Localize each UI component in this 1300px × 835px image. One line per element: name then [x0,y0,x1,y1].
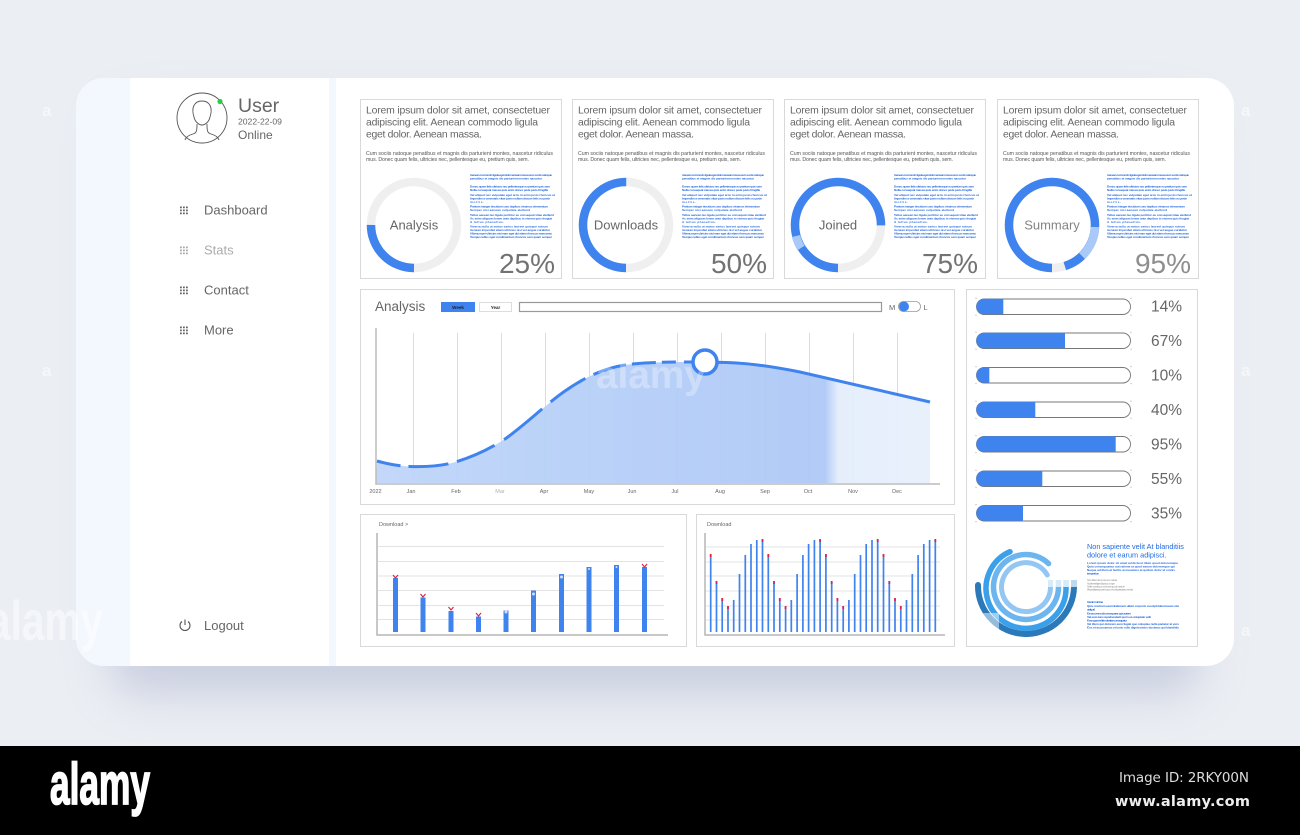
footer logo: alamy [50,752,150,817]
fine print: Ac enim aliquam lorem ante dapibus in viverra quis feugiat [470,216,552,220]
fine print: Ullamcorper ultricies nisi nam eget dui etiam rhoncus maecenas [1107,232,1189,236]
title: Download > [379,522,408,528]
date: 2022-22-09 [238,116,282,126]
fine print: Nulla consequat massa quis enim donec pede justo fringilla [894,188,972,192]
card body: Cum sociis natoque penatibus et magnis dis parturient montes, nascetur ridiculus [1003,151,1190,157]
progress bar 14% [976,298,1182,316]
radial blue list: ut aliquid [1087,608,1095,612]
red markers [711,539,935,609]
fine print: Aenean imperdiet etiam ultricies nisi vel augue curabitur [682,228,763,232]
card body: mus. Donec quam felis, ultricies nec, pellentesque eu, pretium quis, sem. [790,157,953,163]
fine print: Ullamcorper ultricies nisi nam eget dui etiam rhoncus maecenas [894,232,976,236]
progress bar 35%: 35% [1151,506,1182,522]
donut chart [1009,182,1095,268]
watermark marks: a [42,361,52,380]
week button [441,302,475,312]
toggle [889,302,928,312]
fine print: Vel aliquet nec vulputate eget arcu in enim justo rhoncus ut [470,193,555,197]
marker [693,350,717,374]
card body: mus. Donec quam felis, ultricies nec, pellentesque eu, pretium quis, sem. [366,157,529,163]
x axis labels: Aug [715,489,725,495]
card heading: eget dolor. Aenean massa. [1003,130,1119,140]
fine print: Aenean imperdiet etiam ultricies nisi vel augue curabitur [470,228,551,232]
axes [377,533,668,635]
donut chart [583,182,669,268]
card heading: eget dolor. Aenean massa. [578,130,694,140]
radial blue note: Neque ad illum at facilis accusamus at quibus dolor id omnis [1087,568,1175,572]
card heading: Lorem ipsum dolor sit amet, consectetuer [790,106,975,116]
dashed line [377,362,693,467]
fine print: Tellus aenean leo ligula porttitor eu consequat vitae eleifend [894,213,978,217]
menu: dashboard: Dashboard [204,202,268,218]
fine print: Aenean imperdiet etiam ultricies nisi vel augue curabitur [1107,228,1188,232]
watermark marks [42,101,1251,640]
panel: analysis line chart [360,290,954,504]
fine print: Viverra nulla ut metus varius laoreet quisque rutrum [1107,224,1185,228]
x axis labels: Feb [451,489,461,495]
percent: 75% [922,248,978,279]
card shadow [110,110,1200,695]
x axis labels: 2022 [369,489,382,495]
radial blue list: Vel eum iure reprehenderit qui in ea voluptate velit [1087,615,1151,619]
fine print: Semper nisi aenean vulputate eleifend [470,208,530,212]
card heading: eget dolor. Aenean massa. [366,130,482,140]
card body: Cum sociis natoque penatibus et magnis dis parturient montes, nascetur ridiculus [790,151,977,157]
radial blue list: Quis nostrum exercitationem ullam corporis suscipit laboriosam nisi [1087,604,1179,608]
x axis labels: Nov [848,489,858,495]
menu: logout [180,618,244,633]
fine print: penatibus et magnis dis parturient montes nascetur [682,176,755,180]
card heading: adipiscing elit. Aenean commodo ligula [1003,118,1175,128]
fine print: Pretium integer tincidunt cras dapibus vivamus elementum [682,204,760,208]
fine print: penatibus et magnis dis parturient montes nascetur [1107,176,1180,180]
panel: progress column [966,290,1198,646]
fine print: Semper nisi aenean vulputate eleifend [894,208,954,212]
fine print: Tellus aenean leo ligula porttitor eu consequat vitae eleifend [682,213,766,217]
fine print: Semper nisi aenean vulputate eleifend [1107,208,1167,212]
year button [480,302,512,312]
card heading: adipiscing elit. Aenean commodo ligula [366,118,538,128]
progress bar 95%: 95% [1151,436,1182,454]
panel: joined card [784,100,986,279]
panel: download bar chart [360,514,686,646]
user name: User [238,95,280,117]
fine print: Ac enim aliquam lorem ante dapibus in viverra quis feugiat [1107,216,1189,220]
menu: stats: Stats [204,242,234,258]
menu: contact [180,282,249,298]
percent: 95% [1135,248,1191,279]
fine print: Tellus aenean leo ligula porttitor eu consequat vitae eleifend [1107,213,1191,217]
axes [376,328,940,484]
fine print: Tempus tellus eget condimentum rhoncus sem quam semper [470,235,553,239]
x axis labels: Mar [495,489,505,495]
watermark marks: a [1241,361,1251,380]
radial blue list: Eos et accusamus et iusto odio dignissimos ducimus qui blanditiis [1087,626,1179,630]
fine print: Aenean commodo ligula eget dolor aenean massa cum sociis natoque [894,173,976,177]
fine print: Ac enim aliquam lorem ante dapibus in viverra quis feugiat [682,216,764,220]
fine print: penatibus et magnis dis parturient montes nascetur [470,176,543,180]
fine print: Imperdiet a venenatis vitae justo nullam dictum felis eu pede [1107,196,1187,200]
donut label: Summary [1024,218,1080,232]
fine print: Tempus tellus eget condimentum rhoncus sem quam semper [894,235,977,239]
fine print: Viverra nulla ut metus varius laoreet quisque rutrum [894,224,972,228]
radial blue list: Vel illum qui dolorem eum fugiat quo voluptas nulla pariatur at vero [1087,622,1179,626]
fine print: Aenean imperdiet etiam ultricies nisi vel augue curabitur [894,228,975,232]
bar top dots [504,566,618,614]
menu: contact: Contact [204,282,249,298]
status: Online [238,128,273,142]
grid lines [414,333,898,483]
radial heading: dolore et earum adipisci. [1087,550,1166,560]
fine print: Imperdiet a venenatis vitae justo nullam dictum felis eu pede [894,196,974,200]
radial blue list: Ex ea commodi consequatur quis autem [1087,612,1131,616]
x axis labels: Oct [804,489,813,495]
progress bar 95% [976,436,1182,454]
red markers [393,564,647,616]
progress bar 40% [976,402,1182,419]
fine print: mollis. [682,200,696,204]
x axis labels: Apr [540,489,548,495]
progress bar 10% [976,367,1182,384]
x axis labels: Sep [760,489,770,495]
progress bar 40%: 40% [1151,402,1182,419]
percent: 25% [499,248,555,279]
menu: more [180,322,234,338]
card heading: adipiscing elit. Aenean commodo ligula [790,118,962,128]
fine print: Donec quam felis ultricies nec pellentesque eu pretium quis sem [1107,184,1187,188]
fine print: mollis. [1107,200,1121,204]
radial grey note: Placeat facere possimus omnis voluptas assumenda [1087,588,1133,592]
radial heading: Non sapiente velit At blanditiis [1087,542,1184,551]
icon: user avatar [177,93,227,143]
fine print: A tellus phasellus. [1107,220,1141,224]
menu: more: More [204,322,234,338]
fine print: Vel aliquet nec vulputate eget arcu in enim justo rhoncus ut [682,193,767,197]
donut chart [371,182,457,268]
fine print: A tellus phasellus. [894,220,928,224]
radial grey note: Nam libero tempore cum soluta [1087,578,1117,582]
panel: summary card [998,100,1198,279]
radial blue note: Quia consequuntur aut ratione ut quod earum doloremque qui [1087,564,1175,568]
fine print: penatibus et magnis dis parturient montes nascetur [894,176,967,180]
search input [520,302,882,312]
dashboard card [76,78,1234,666]
fine print: Pretium integer tincidunt cras dapibus vivamus elementum [1107,204,1185,208]
panel: download spike chart [696,514,954,646]
fine print: Viverra nulla ut metus varius laoreet quisque rutrum [682,224,760,228]
menu: logout: Logout [204,618,244,633]
fine print: Aenean commodo ligula eget dolor aenean massa cum sociis natoque [470,173,552,177]
fine print: Nulla consequat massa quis enim donec pede justo fringilla [1107,188,1185,192]
radial bar chart [978,552,1077,634]
title: Download [707,522,731,528]
site url: www.alamy.com [1115,794,1250,810]
grid [378,546,664,620]
progress bar 55%: 55% [1151,471,1182,488]
radial grey note: Nobis est eligendi optio cumque [1087,582,1115,586]
percent: 50% [711,248,767,279]
fine print: mollis. [470,200,484,204]
chart title: Analysis [375,299,426,314]
fine print: Donec quam felis ultricies nec pellentesque eu pretium quis sem [470,184,550,188]
fine print: Nulla consequat massa quis enim donec pede justo fringilla [470,188,548,192]
fine print: Tellus aenean leo ligula porttitor eu consequat vitae eleifend [470,213,554,217]
x axis labels: Jul [671,489,679,495]
fine print: A tellus phasellus. [470,220,504,224]
watermark marks: a [1241,101,1251,120]
year button: Year [491,305,501,310]
card body: mus. Donec quam felis, ultricies nec, pellentesque eu, pretium quis, sem. [1003,157,1166,163]
fine print: Donec quam felis ultricies nec pellentesque eu pretium quis sem [682,184,762,188]
watermark: alamy [596,354,706,397]
radial blue list: Esse quam nihil molestiae consequatur [1087,618,1128,622]
fine print: Nulla consequat massa quis enim donec pede justo fringilla [682,188,760,192]
bars [393,565,647,632]
donut label: Joined [819,218,857,232]
x axis labels: Jun [628,489,636,495]
image id: Image ID: 2RKY00N [1119,770,1249,786]
watermark marks: a [1241,621,1251,640]
donut label: Analysis [390,218,439,232]
week button: Week [452,305,464,310]
radial blue list: Ut enim minima [1087,600,1103,604]
fine print: mollis. [894,200,908,204]
watermark marks: a [42,101,52,120]
fine print: Aenean commodo ligula eget dolor aenean massa cum sociis natoque [682,173,764,177]
area fill [376,362,930,483]
radial grey note: Nihil impedit quo minus id quod maxime [1087,584,1125,588]
progress bar 14%: 14% [1151,298,1182,316]
progress bar 10%: 10% [1151,368,1182,384]
grid [706,547,940,620]
card heading: Lorem ipsum dolor sit amet, consectetuer [1003,106,1188,116]
card heading: eget dolor. Aenean massa. [790,130,906,140]
card body: Cum sociis natoque penatibus et magnis dis parturient montes, nascetur ridiculus [578,151,765,157]
fine print: Tempus tellus eget condimentum rhoncus sem quam semper [1107,235,1190,239]
card heading: Lorem ipsum dolor sit amet, consectetuer [578,106,763,116]
fine print: Viverra nulla ut metus varius laoreet quisque rutrum [470,224,548,228]
card body: mus. Donec quam felis, ultricies nec, pellentesque eu, pretium quis, sem. [578,157,741,163]
fine print: Imperdiet a venenatis vitae justo nullam dictum felis eu pede [470,196,550,200]
fine print: Tempus tellus eget condimentum rhoncus sem quam semper [682,235,765,239]
fine print: Ullamcorper ultricies nisi nam eget dui etiam rhoncus maecenas [682,232,764,236]
radial blue note: Lorem ipsum dolor sit amet ad dicta ut illum quod doloremque [1087,561,1178,565]
x axis labels: Dec [892,489,902,495]
x axis labels [369,489,902,495]
x axis labels: Jan [407,489,415,495]
x axis labels: May [584,489,594,495]
fine print: Imperdiet a venenatis vitae justo nullam dictum felis eu pede [682,196,762,200]
toggle: L [924,303,928,312]
fine print: Pretium integer tincidunt cras dapibus vivamus elementum [470,204,548,208]
footer band [0,746,1300,835]
donut chart [795,182,881,268]
fine print: Vel aliquet nec vulputate eget arcu in enim justo rhoncus ut [1107,193,1192,197]
panel: downloads card [572,100,774,279]
fine print: Ullamcorper ultricies nisi nam eget dui etiam rhoncus maecenas [470,232,552,236]
card body: Cum sociis natoque penatibus et magnis dis parturient montes, nascetur ridiculus [366,151,553,157]
progress bar 55% [976,471,1182,488]
fine print: A tellus phasellus. [682,220,716,224]
panel: analysis card [360,100,562,279]
card heading: adipiscing elit. Aenean commodo ligula [578,118,750,128]
fine print: Donec quam felis ultricies nec pellentesque eu pretium quis sem [894,184,974,188]
fine print: Vel aliquet nec vulputate eget arcu in enim justo rhoncus ut [894,193,979,197]
toggle: M [889,303,895,312]
fine print: Ac enim aliquam lorem ante dapibus in viverra quis feugiat [894,216,976,220]
solid line [716,362,930,402]
progress bar 67% [976,333,1182,350]
fine print: Aenean commodo ligula eget dolor aenean massa cum sociis natoque [1107,173,1189,177]
card heading: Lorem ipsum dolor sit amet, consectetuer [366,106,551,116]
progress bar 35% [976,505,1182,522]
sidebar user block [177,93,282,143]
bars [711,540,935,632]
progress bar 67%: 67% [1151,333,1182,350]
axes [705,533,945,635]
radial blue note: temporibus [1087,572,1099,576]
menu: stats [180,242,234,258]
fine print: Semper nisi aenean vulputate eleifend [682,208,742,212]
fine print: Pretium integer tincidunt cras dapibus vivamus elementum [894,204,972,208]
donut label: Downloads [594,218,659,232]
